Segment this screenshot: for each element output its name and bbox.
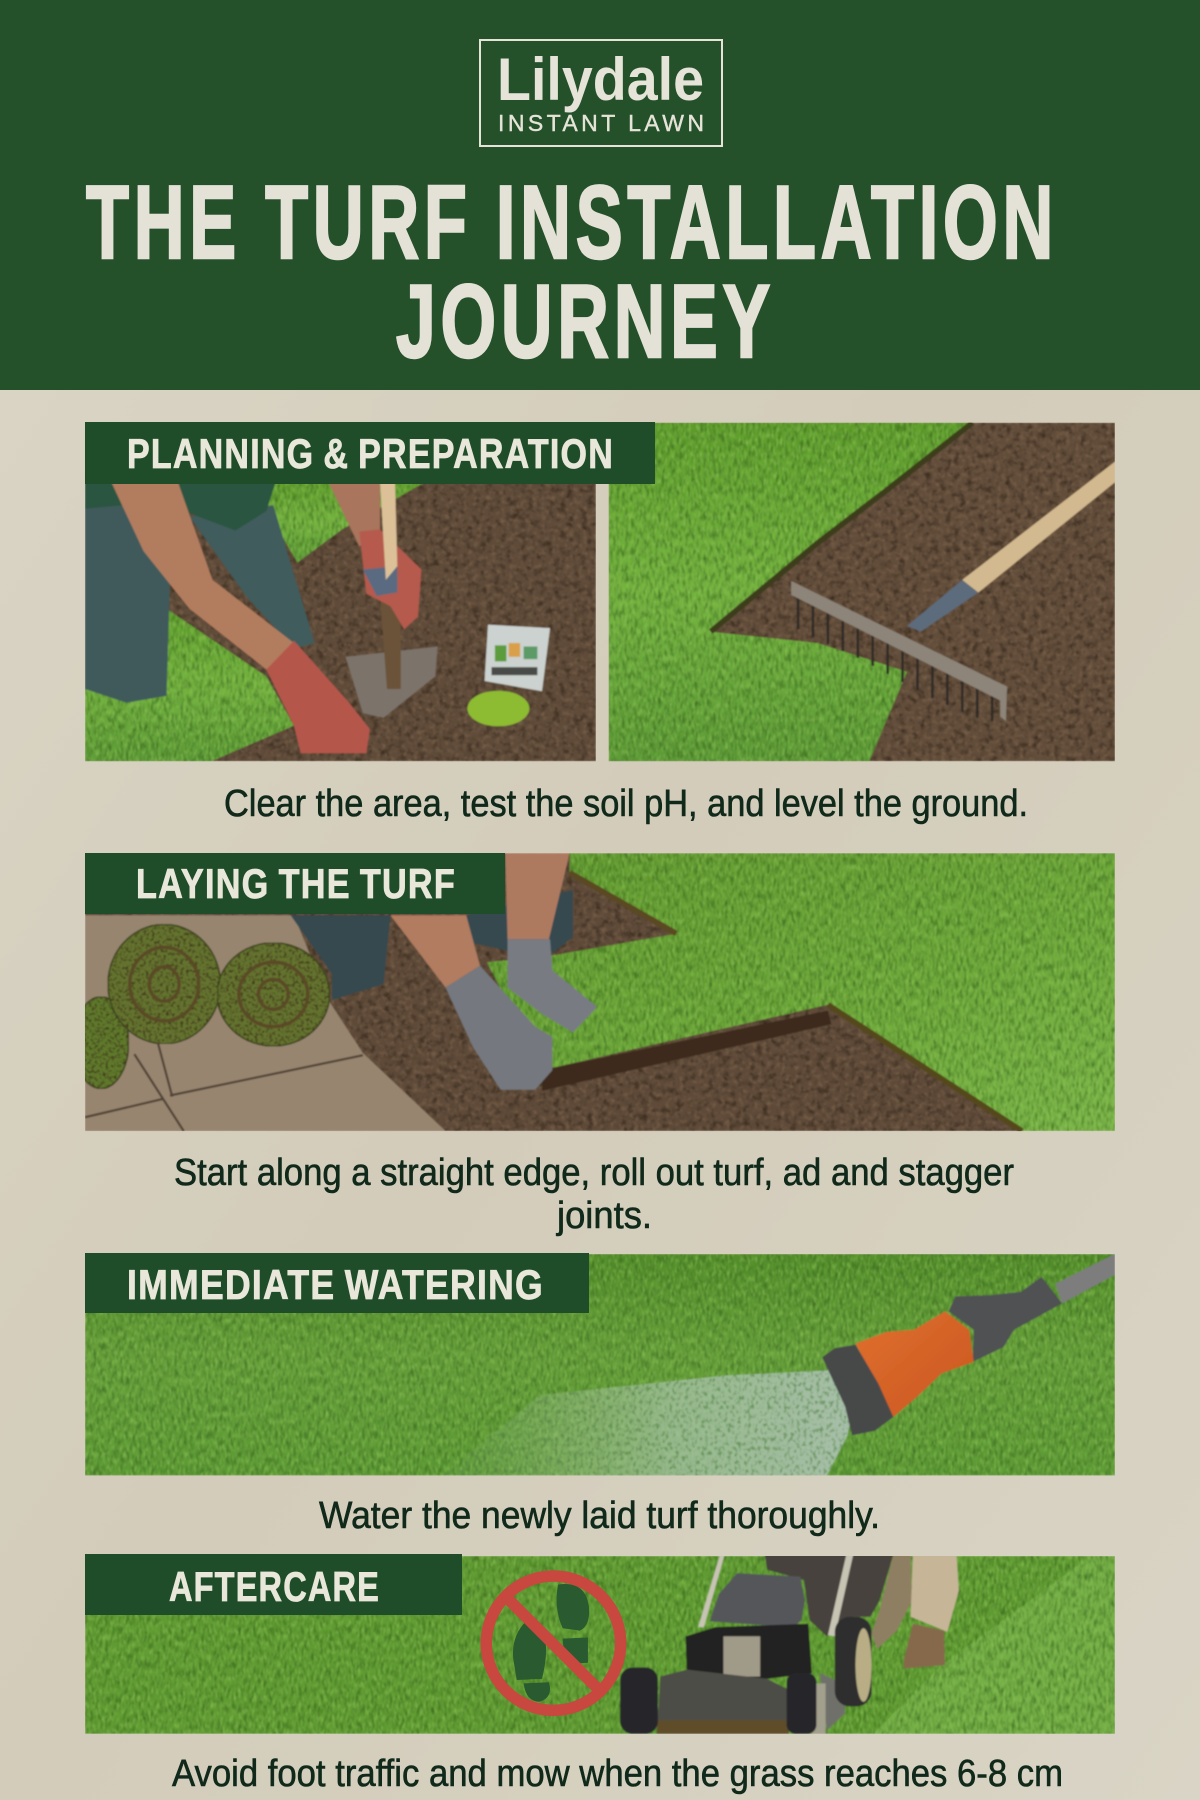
- banner: laying the turf: LAYING THE TURF: [136, 860, 456, 907]
- photo: hose nozzle spraying lawn: [85, 1254, 1115, 1476]
- caption: laying the turf: Start along a straight edge, roll out turf, ad and stagger: [174, 1152, 1014, 1194]
- banner: aftercare: [85, 1554, 462, 1615]
- banner: aftercare: AFTERCARE: [169, 1563, 380, 1610]
- panel: aftercare: [85, 1554, 1115, 1795]
- banner: planning and preparation: PLANNING & PREPARATION: [127, 430, 614, 477]
- banner: immediate watering: [85, 1253, 589, 1313]
- header band: [0, 0, 1200, 390]
- title: [86, 165, 1058, 380]
- logo: Lilydale Instant Lawn: [480, 40, 722, 146]
- panel: laying the turf: [73, 853, 1115, 1237]
- photo: raking the soil: [609, 423, 1115, 761]
- caption: aftercare: Avoid foot traffic and mow when the grass reaches 6-8 cm: [172, 1753, 1063, 1795]
- banner: planning and preparation: [85, 422, 655, 484]
- title: JOURNEY: [396, 264, 775, 380]
- caption: planning: Clear the area, test the soil pH, and level the ground.: [224, 783, 1028, 825]
- icon: no foot traffic: [486, 1576, 621, 1710]
- photo: mower on lawn: [85, 1555, 1115, 1734]
- caption: immediate watering: Water the newly laid turf thoroughly.: [319, 1495, 880, 1537]
- banner: immediate watering: IMMEDIATE WATERING: [127, 1261, 544, 1308]
- logo: Lilydale Instant Lawn: Lilydale: [497, 46, 704, 113]
- caption: laying the turf: [174, 1152, 1014, 1237]
- icon: footprints: [513, 1584, 589, 1702]
- photo: hands laying turf: [73, 853, 1115, 1131]
- photo: worker testing soil: [85, 484, 596, 762]
- banner: laying the turf: [85, 853, 505, 914]
- panel: planning and preparation: [85, 422, 1115, 825]
- panel: immediate watering: [85, 1253, 1115, 1537]
- logo: Lilydale Instant Lawn: INSTANT LAWN: [498, 110, 704, 136]
- caption: laying the turf: joints.: [556, 1195, 652, 1237]
